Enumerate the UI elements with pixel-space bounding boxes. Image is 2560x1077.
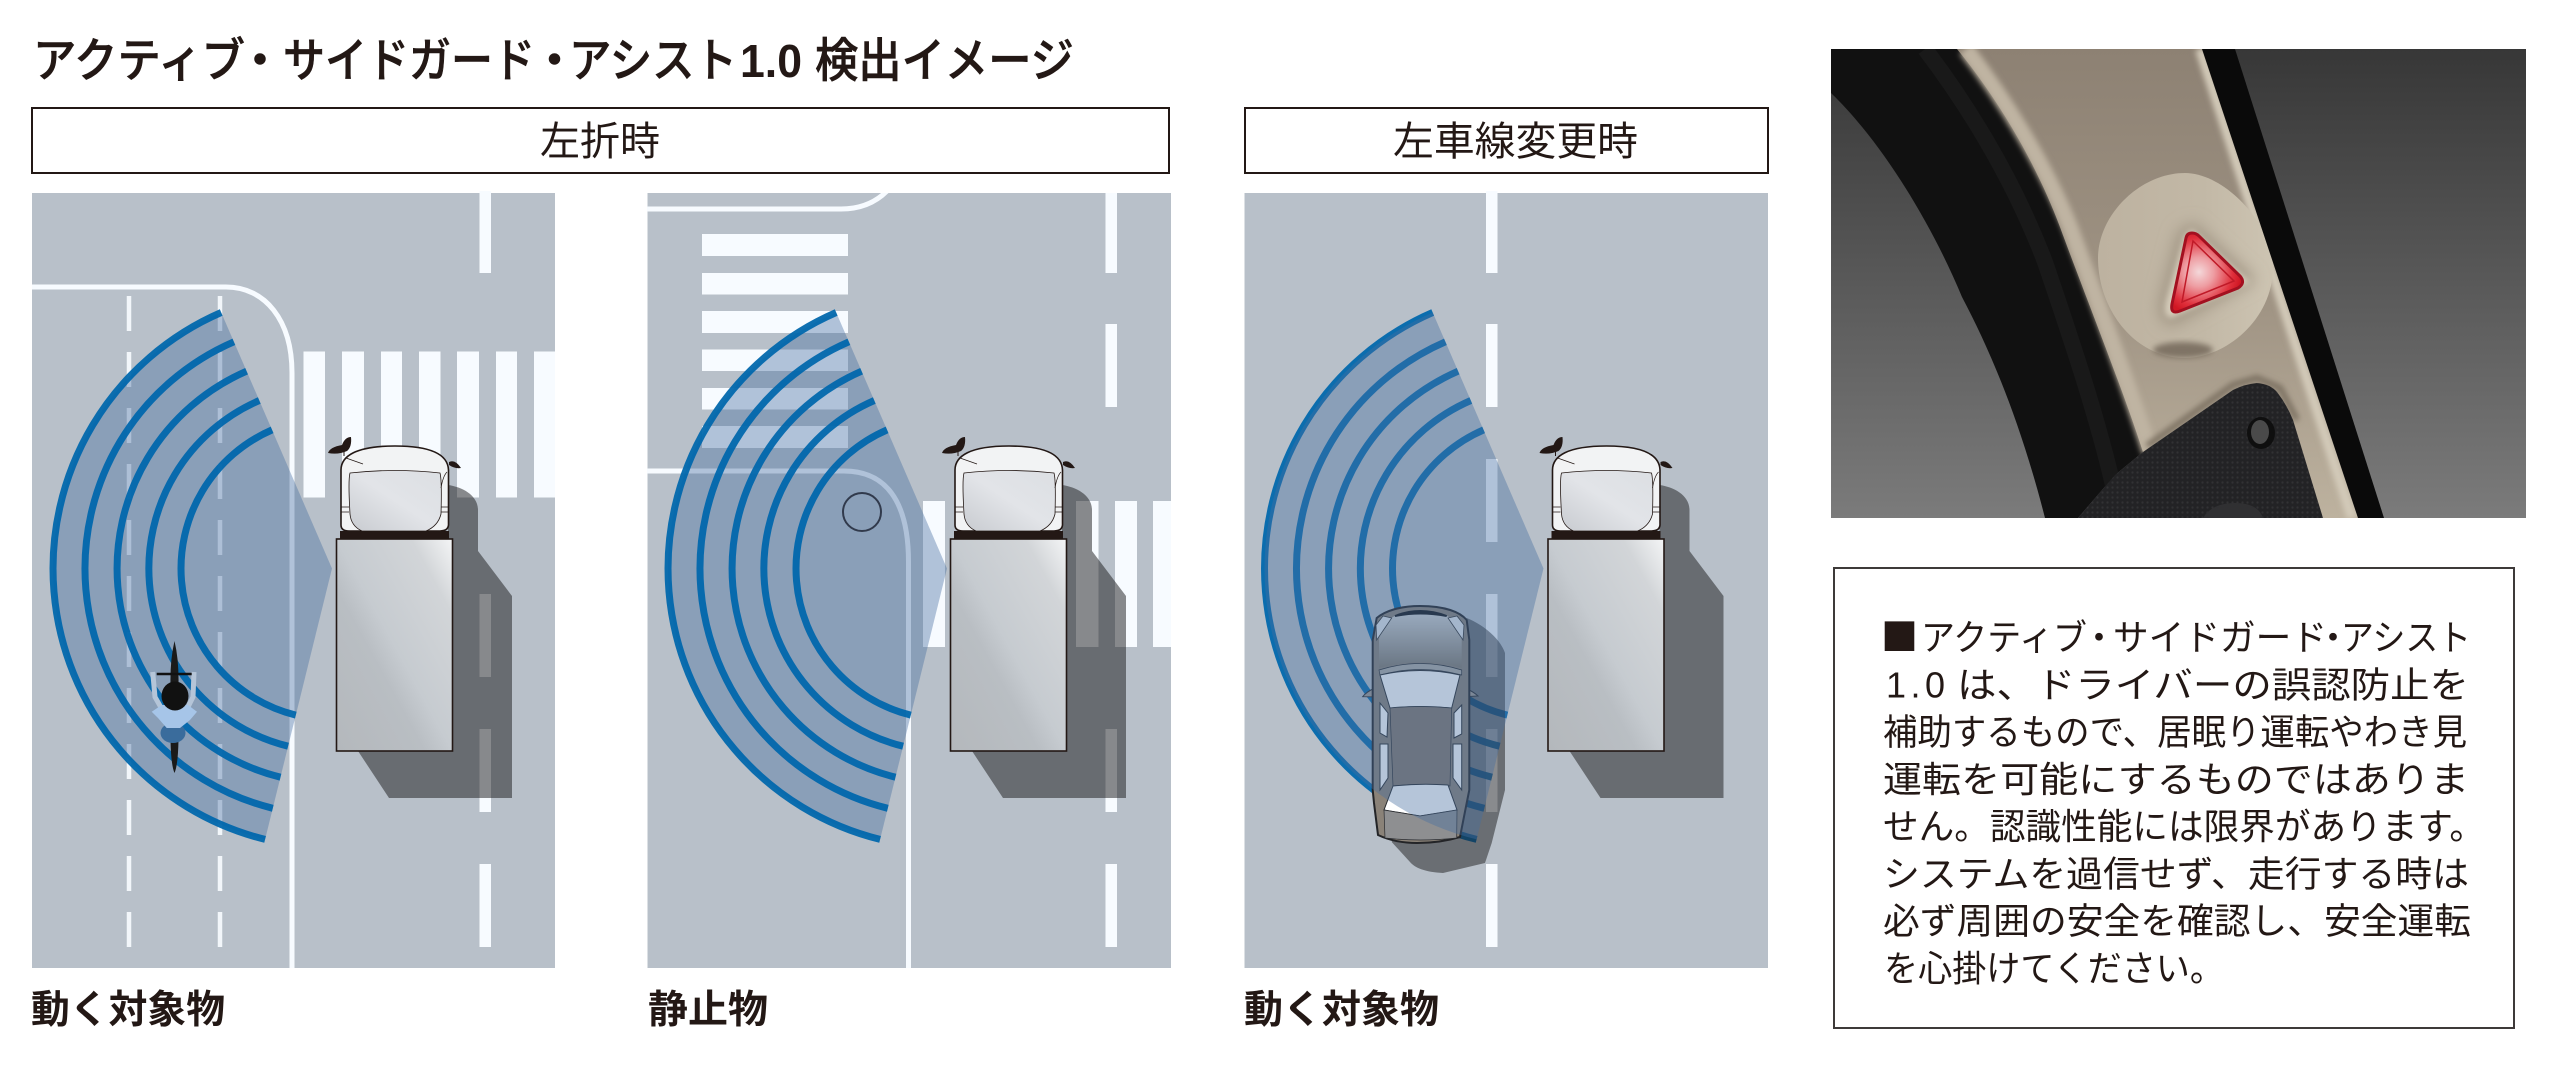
heading box: left turn	[32, 108, 1169, 173]
note text: 運転を可能にするものではありま	[1883, 759, 2469, 800]
road markings	[647, 191, 1171, 968]
lane dashes	[1486, 191, 1498, 947]
note text: ■	[1881, 607, 1918, 661]
note text: アシスト	[2341, 617, 2471, 658]
lamp bulge	[2098, 173, 2273, 358]
icon: cyclist	[152, 641, 197, 773]
note text: を心掛けてください。	[1884, 948, 2224, 989]
black textured trim	[2078, 378, 2323, 518]
truck	[328, 437, 512, 798]
heading box: left turn: 左折時	[540, 120, 660, 164]
note text: せん。認識性能には限界があります。	[1883, 806, 2485, 847]
icon: red warning triangle	[2172, 233, 2243, 312]
note text: システムを過信せず、走行する時は	[1883, 853, 2469, 894]
beige pillar	[1957, 49, 2358, 518]
black window strip	[2202, 49, 2384, 518]
title: 1.0	[740, 35, 802, 87]
note text: 1.0	[1886, 664, 1945, 705]
black door seal	[1831, 49, 2143, 518]
heading box: left lane change: 左車線変更時	[1393, 120, 1638, 164]
title: アクティブ	[33, 34, 245, 87]
detection fan	[668, 312, 947, 839]
note text: ・	[2081, 617, 2117, 658]
detection arcs	[1265, 312, 1507, 839]
truck	[942, 437, 1126, 798]
title	[33, 34, 1074, 87]
detection fan	[53, 312, 332, 839]
road markings	[32, 191, 555, 968]
note box	[1834, 568, 2514, 1028]
caption: moving object: 動く対象物	[31, 989, 225, 1032]
note text	[1881, 607, 2485, 989]
caption: moving object: 動く対象物	[1244, 989, 1439, 1032]
car	[1363, 606, 1478, 843]
title: ・	[531, 34, 578, 87]
title: サイドガード	[283, 34, 535, 87]
icon: manhole	[843, 493, 881, 531]
note text: ・	[2315, 617, 2351, 658]
panel: left turn, stationary object	[647, 191, 1171, 968]
photo: A-pillar warning lamp	[1831, 49, 2526, 518]
note text: 必ず周囲の安全を確認し、安全運転	[1883, 901, 2471, 942]
caption: stationary object: 静止物	[648, 989, 768, 1032]
detection fan fill over the car	[1265, 312, 1544, 839]
title: 検出イメージ	[815, 34, 1074, 87]
note text: は、ドライバーの誤認防止を	[1957, 664, 2469, 705]
note text: サイドガード	[2113, 617, 2327, 658]
truck	[1540, 437, 1724, 798]
note text: アクティブ	[1921, 617, 2087, 658]
panel: left turn, moving object (cyclist)	[32, 191, 555, 968]
panel: left lane change, moving object (car)	[1244, 191, 1768, 968]
note text: 補助するもので、居眠り運転やわき見	[1883, 712, 2467, 752]
title: アシスト	[569, 34, 737, 87]
heading box: left lane change	[1245, 108, 1768, 173]
title: ・	[236, 34, 284, 87]
car shadow	[1392, 618, 1505, 873]
